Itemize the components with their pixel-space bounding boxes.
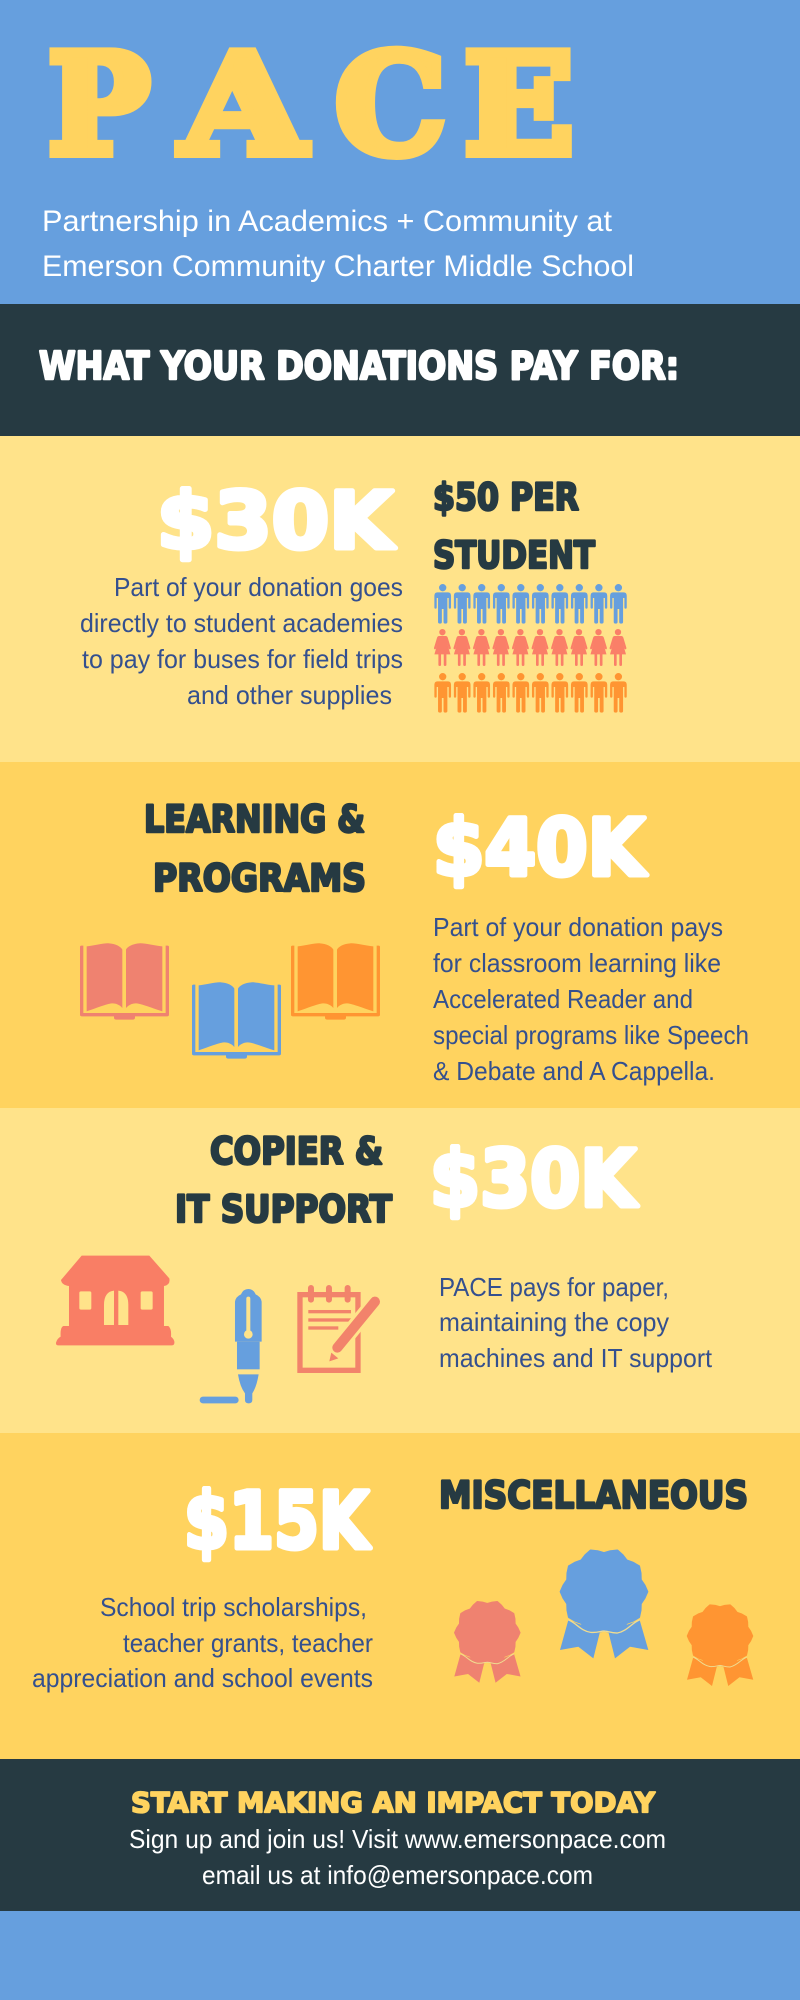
title: C: [335, 23, 446, 186]
description: to pay for buses for field trips: [82, 644, 403, 674]
description: Accelerated Reader and: [433, 984, 693, 1014]
panel: learning and programs: [0, 762, 800, 1108]
icon: book coral: [80, 943, 169, 1020]
heading: [175, 1130, 393, 1231]
amount: $40K: [433, 804, 647, 894]
icon: notepad and pencil: [300, 1285, 375, 1370]
icon: book orange: [291, 943, 380, 1020]
description: directly to student academies: [80, 608, 403, 638]
title: A: [179, 23, 307, 186]
amount: $15K: [184, 1477, 371, 1567]
title: E: [464, 23, 574, 186]
heading: PROGRAMS: [153, 857, 366, 900]
description: PACE pays for paper,: [439, 1272, 669, 1302]
icon: student figures blue: [434, 584, 627, 624]
subtitle: Emerson Community Charter Middle School: [42, 250, 634, 283]
heading: WHAT YOUR DONATIONS PAY FOR:: [39, 344, 679, 388]
icon: student figures coral: [434, 629, 626, 666]
heading: IT SUPPORT: [175, 1188, 393, 1231]
description: & Debate and A Cappella.: [433, 1056, 715, 1086]
heading: per student: [433, 476, 596, 577]
heading: per student: $50 PER: [433, 476, 579, 519]
subtitle: Partnership in Academics + Community at: [42, 205, 613, 238]
heading: per student: STUDENT: [433, 534, 596, 577]
panel: $30K per student: [0, 436, 800, 762]
description: Part of your donation pays: [433, 912, 723, 942]
description: and other supplies: [187, 680, 392, 710]
heading: [144, 798, 366, 900]
contact text: Sign up and join us! Visit www.emersonpace.com: [129, 1824, 666, 1854]
description: School trip scholarships,: [100, 1592, 367, 1622]
description: machines and IT support: [439, 1343, 713, 1373]
panel: header: [0, 0, 800, 304]
amount: $30K: [430, 1135, 638, 1225]
description: [439, 1272, 713, 1373]
title: P: [48, 23, 150, 186]
description: special programs like Speech: [433, 1020, 749, 1050]
panel: miscellaneous: [0, 1433, 800, 1759]
contact text: email us at info@emersonpace.com: [202, 1860, 593, 1890]
heading: COPIER &: [210, 1130, 383, 1173]
description: appreciation and school events: [32, 1663, 373, 1693]
description: maintaining the copy: [439, 1307, 669, 1337]
icon: ribbon orange: [687, 1605, 753, 1686]
panel: section heading: [0, 304, 800, 436]
icon: ribbon coral: [454, 1602, 521, 1683]
description: [433, 912, 749, 1086]
description: [32, 1592, 373, 1693]
icon: school building: [56, 1256, 174, 1345]
panel: call to action: [0, 1759, 800, 1911]
panel: footer band: [0, 1911, 800, 2000]
amount: $30K: [157, 477, 396, 567]
panel: copier and IT support: [0, 1108, 800, 1433]
icon: ribbon blue: [560, 1551, 648, 1658]
description: teacher grants, teacher: [123, 1628, 373, 1658]
heading: MISCELLANEOUS: [439, 1474, 748, 1517]
description: for classroom learning like: [433, 948, 721, 978]
heading: START MAKING AN IMPACT TODAY: [131, 1786, 656, 1819]
contact text: [129, 1824, 666, 1890]
heading: LEARNING &: [144, 798, 365, 841]
description: Part of your donation goes: [114, 572, 403, 602]
description: [80, 572, 403, 710]
subtitle: [42, 205, 634, 283]
icon: book blue: [192, 982, 281, 1059]
title: [48, 23, 574, 186]
icon: highlighter pen: [200, 1289, 262, 1403]
icon: student figures orange: [434, 673, 627, 713]
